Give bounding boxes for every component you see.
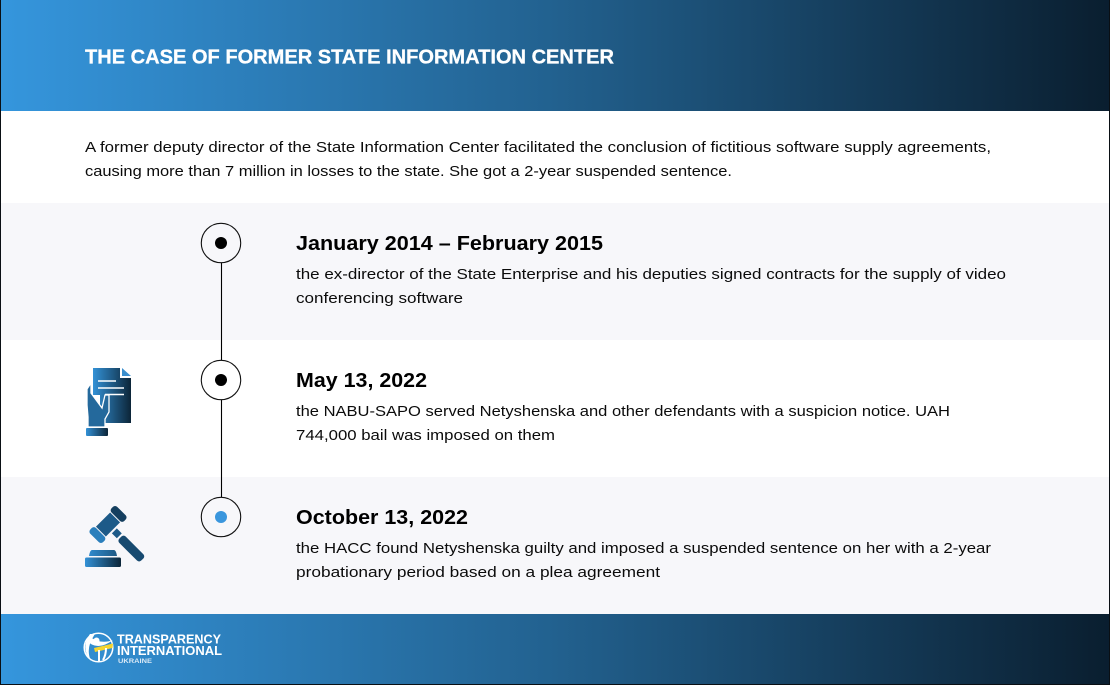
entry 1: the ex-director of the State Enterprise and his deputies signed contracts for the supply of video <box>296 266 1006 283</box>
entry 1: January 2014 – February 2015 <box>296 233 603 255</box>
entry 1: conferencing software <box>296 290 463 307</box>
icon: hand holding document <box>86 368 131 436</box>
entry 2 <box>296 370 950 444</box>
logo: Transparency International Ukraine: UKRAINE <box>118 658 153 665</box>
entry 1 <box>296 233 1006 307</box>
intro text <box>85 139 991 180</box>
header band <box>0 0 1110 111</box>
timeline marker 1 <box>201 223 241 263</box>
logo: Transparency International Ukraine: INTERNATIONAL <box>117 643 222 658</box>
icon: gavel <box>85 505 156 573</box>
intro text: A former deputy director of the State Information Center facilitated the conclusion of fictitious software supply agreements, <box>85 139 991 156</box>
entry 2: May 13, 2022 <box>296 370 427 392</box>
timeline marker 3 <box>201 497 241 537</box>
footer band <box>0 614 1110 684</box>
logo: Transparency International Ukraine: TRANSPARENCY <box>117 632 221 646</box>
entry 2: 744,000 bail was imposed on them <box>296 427 555 444</box>
timeline marker 2 <box>201 360 241 400</box>
timeline connector <box>220 263 222 497</box>
entry 3: October 13, 2022 <box>296 507 468 529</box>
entry 3: probationary period based on a plea agreement <box>296 564 661 581</box>
entry 3: the HACC found Netyshenska guilty and imposed a suspended sentence on her with a 2-year <box>296 540 991 557</box>
intro text: causing more than 7 million in losses to the state. She got a 2-year suspended sentence. <box>85 163 732 180</box>
entry 3 <box>296 507 991 581</box>
panel: row 3 background <box>0 477 1110 614</box>
entry 2: the NABU-SAPO served Netyshenska and other defendants with a suspicion notice. UAH <box>296 403 950 420</box>
logo: Transparency International Ukraine <box>84 632 222 665</box>
title: THE CASE OF FORMER STATE INFORMATION CENTER <box>85 46 615 68</box>
panel: row 1 background <box>0 203 1110 340</box>
